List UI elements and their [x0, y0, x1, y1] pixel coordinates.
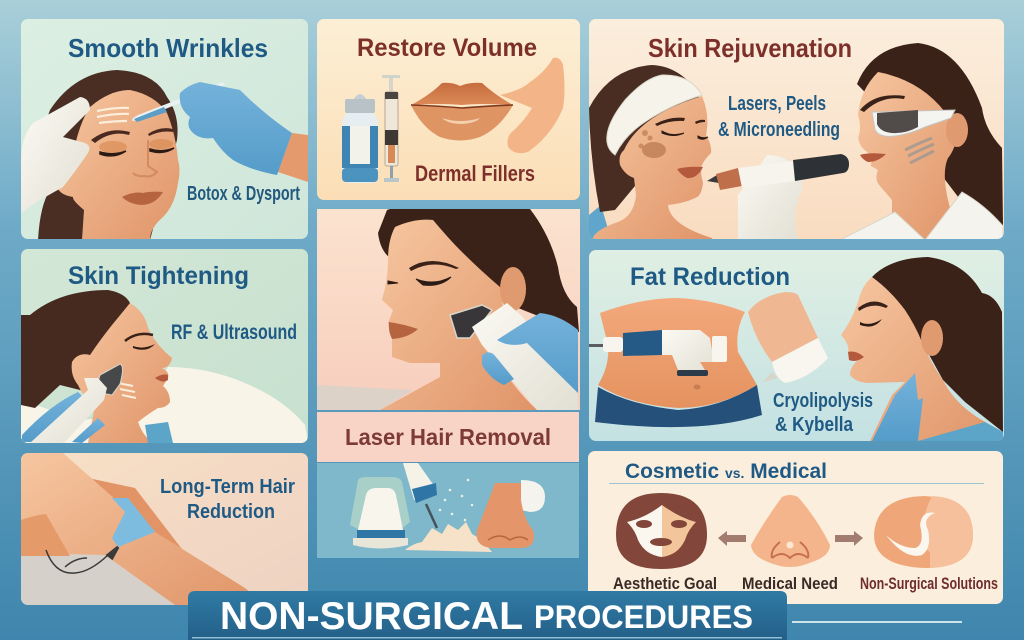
panel: long-term hair reduction — [21, 453, 308, 605]
panel: cosmetic vs medical — [588, 451, 1003, 604]
illustration: face with injection — [21, 70, 308, 240]
icon: cooling applicator — [748, 292, 828, 383]
title: PROCEDURES — [534, 599, 753, 635]
text: cryolipolysis and kybella: Cryolipolysis — [773, 390, 873, 412]
label: medical need: Medical Need — [742, 575, 838, 593]
panel: fat reduction — [588, 250, 1004, 441]
icon: fingertip — [500, 58, 564, 153]
title: NON-SURGICAL — [220, 595, 523, 638]
arrow: left — [718, 531, 746, 546]
illustration: woman with device — [21, 290, 308, 443]
icon: microneedling pen — [707, 154, 849, 190]
icon: half mask face — [616, 493, 707, 569]
heading: smooth wrinkles: Smooth Wrinkles — [68, 33, 268, 63]
icon: granules — [405, 522, 492, 552]
text: long-term hair reduction: Long-Term Hair — [160, 476, 295, 498]
icon: syringe — [382, 75, 400, 182]
panel: restore volume — [317, 19, 580, 200]
illustration: woman with laser handpiece — [317, 209, 580, 410]
text: dermal fillers: Dermal Fillers — [415, 161, 535, 186]
illustration: treating woman right — [857, 43, 1003, 226]
text: long-term hair reduction — [160, 476, 295, 523]
icon: white glove hand — [738, 155, 802, 240]
illustration: abdomen and devices — [588, 257, 1003, 441]
heading: skin rejuvenation: Skin Rejuvenation — [648, 33, 852, 63]
heading: fat reduction: Fat Reduction — [630, 263, 790, 291]
title banner — [188, 591, 787, 640]
panel: laser hair removal — [317, 209, 580, 558]
panel: smooth wrinkles — [21, 19, 308, 240]
label: aesthetic goal: Aesthetic Goal — [613, 575, 717, 593]
heading: skin tightening: Skin Tightening — [68, 262, 249, 290]
text: lasers peels microneedling — [718, 93, 840, 141]
illustration: arm with cuff — [21, 453, 265, 605]
text: cryolipolysis and kybella: & Kybella — [775, 414, 854, 436]
heading: restore volume: Restore Volume — [357, 34, 537, 62]
icon: lips — [411, 83, 513, 140]
icon: particles — [439, 479, 473, 521]
text: lasers peels microneedling: & Microneedling — [718, 119, 840, 141]
illustration: treated woman left — [589, 43, 1003, 240]
heading: laser hair removal: Laser Hair Removal — [345, 424, 551, 450]
arrow: right — [835, 531, 863, 546]
text: rf and ultrasound: RF & Ultrasound — [171, 321, 297, 344]
heading: cosmetic vs medical: Cosmetic vs. Medical — [625, 460, 827, 483]
icon: nose — [477, 480, 545, 548]
icon: face with contour — [874, 496, 973, 568]
title — [220, 595, 753, 638]
icon: applicator cone — [350, 477, 410, 548]
panel: skin rejuvenation — [589, 19, 1004, 240]
icon: vial — [342, 94, 378, 183]
text: long-term hair reduction: Reduction — [187, 501, 275, 523]
band: laser hair removal — [317, 412, 579, 462]
text: cryolipolysis and kybella — [773, 390, 873, 436]
panel strip: tools — [317, 463, 579, 558]
text: botox and dysport: Botox & Dysport — [187, 183, 300, 205]
text: lasers peels microneedling: Lasers, Peels — [728, 93, 826, 115]
icon: injector — [403, 463, 437, 528]
icon: cryolipolysis handpiece — [588, 330, 727, 376]
panel: skin tightening — [21, 249, 308, 443]
icon: nose — [751, 495, 830, 567]
